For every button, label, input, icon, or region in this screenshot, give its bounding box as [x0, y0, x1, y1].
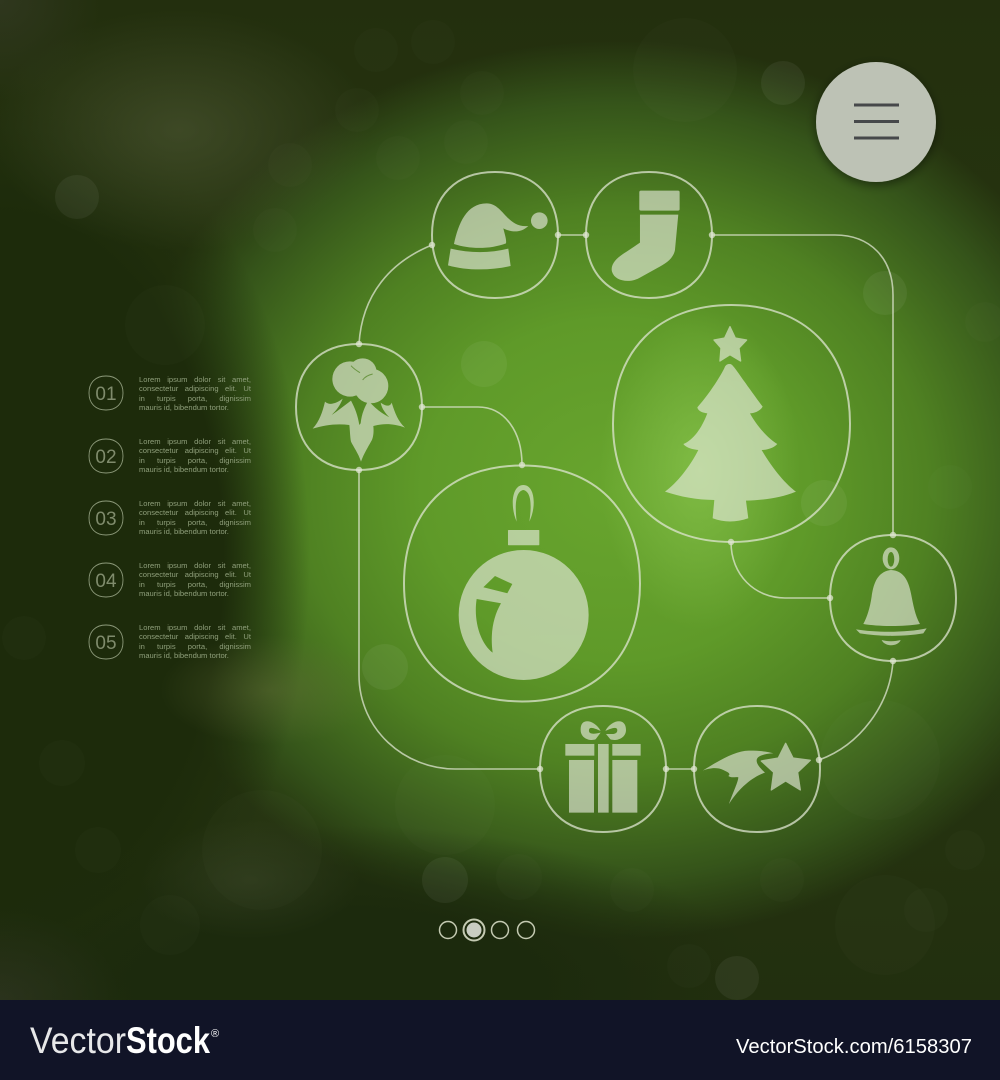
text block 04: consectetur adipiscing elit. Ut [139, 570, 251, 579]
icon: stocking [612, 191, 680, 281]
node: shooting star [694, 706, 820, 832]
text block 03: mauris id, bibendum tortor. [139, 527, 229, 536]
text block 02: Lorem ipsum dolor sit amet, [139, 437, 251, 446]
node: gift [540, 706, 666, 832]
connector dots [356, 232, 896, 772]
number badge 04 [89, 563, 123, 597]
text block 05: Lorem ipsum dolor sit amet, [139, 623, 251, 632]
number badge 05 [89, 625, 123, 659]
number badge 04: 04 [95, 571, 117, 592]
node: bauble [404, 466, 640, 702]
icon: bell [856, 547, 927, 645]
number badge 03: 03 [95, 509, 117, 530]
text block 03: in turpis porta, dignissim [139, 518, 251, 527]
footer bar [0, 1000, 1000, 1080]
icon: gift [565, 721, 641, 813]
text block 04: in turpis porta, dignissim [139, 580, 251, 589]
text block 04 [139, 561, 251, 598]
node: bell [830, 535, 956, 661]
footer logo: Vector [30, 1020, 126, 1061]
icon: christmas tree [665, 327, 796, 522]
text block 05: consectetur adipiscing elit. Ut [139, 632, 251, 641]
text block 01: consectetur adipiscing elit. Ut [139, 384, 251, 393]
number badge 01 [89, 376, 123, 410]
text block 02: mauris id, bibendum tortor. [139, 465, 229, 474]
text block 05: mauris id, bibendum tortor. [139, 651, 229, 660]
footer image id: VectorStock.com/6158307 [736, 1036, 972, 1058]
icon: holly [313, 358, 405, 462]
footer logo: ® [211, 1028, 219, 1040]
text block 05: in turpis porta, dignissim [139, 642, 251, 651]
text block 01: in turpis porta, dignissim [139, 394, 251, 403]
number badge 01: 01 [95, 384, 117, 405]
pagination dots [440, 920, 534, 940]
connector lines [359, 235, 893, 769]
text block 03 [139, 499, 251, 536]
node: christmas tree [613, 305, 850, 542]
icon: santa hat [448, 203, 548, 269]
text block 01: Lorem ipsum dolor sit amet, [139, 375, 251, 384]
text block 02 [139, 437, 251, 474]
menu button [816, 62, 936, 182]
number badge 02: 02 [95, 447, 117, 468]
footer logo [30, 1020, 219, 1061]
text block 02: in turpis porta, dignissim [139, 456, 251, 465]
text block 03: Lorem ipsum dolor sit amet, [139, 499, 251, 508]
icon: bauble [459, 485, 589, 680]
text block 01 [139, 375, 251, 412]
number badge 03 [89, 501, 123, 535]
node: holly [296, 344, 422, 470]
text block 01: mauris id, bibendum tortor. [139, 403, 229, 412]
footer logo: Stock [126, 1020, 210, 1061]
text block 03: consectetur adipiscing elit. Ut [139, 508, 251, 517]
text block 05 [139, 623, 251, 660]
text block 02: consectetur adipiscing elit. Ut [139, 446, 251, 455]
node: santa hat [432, 172, 558, 298]
text block 04: mauris id, bibendum tortor. [139, 589, 229, 598]
node: stocking [586, 172, 712, 298]
number badge 05: 05 [95, 633, 117, 654]
icon: shooting star [703, 743, 810, 804]
text block 04: Lorem ipsum dolor sit amet, [139, 561, 251, 570]
number badge 02 [89, 439, 123, 473]
